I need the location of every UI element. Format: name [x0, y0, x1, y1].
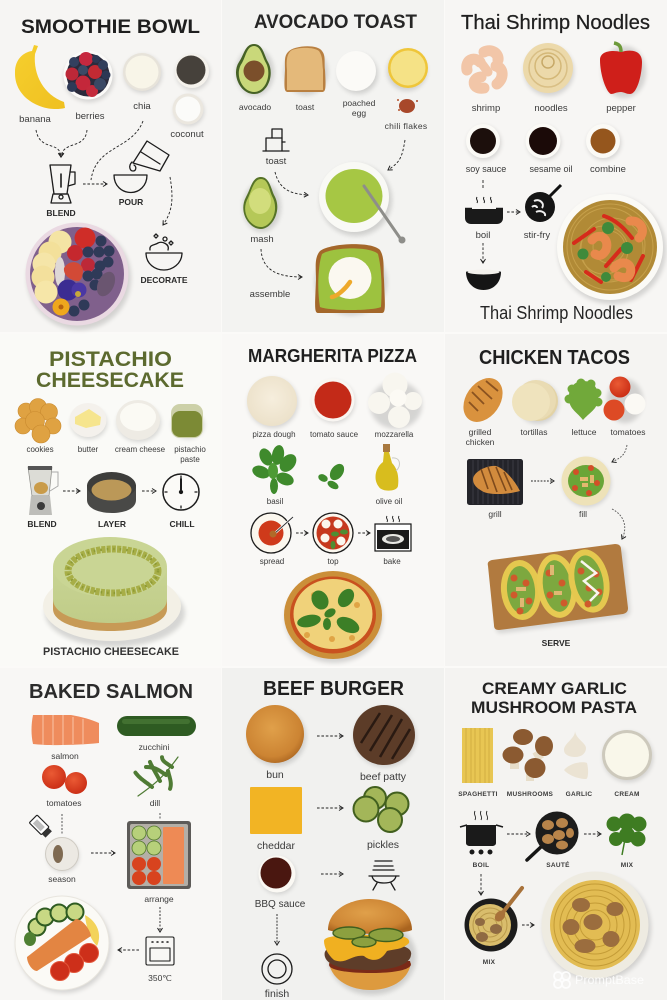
ingredient: pistachio paste: [171, 404, 204, 439]
arrow: spread to top: [296, 532, 308, 534]
arrow: boil to stir-fry: [507, 211, 520, 213]
label: mix step: MIX: [483, 959, 496, 966]
ingredient: beef patty: [353, 705, 416, 767]
ingredient: tomatoes and sour cream: [604, 376, 646, 423]
label: stir-fry: stir-fry: [524, 230, 550, 241]
ingredient: basil small: [317, 461, 347, 491]
title: creamy garlic mushroom pasta: MUSHROOM PASTA: [471, 699, 637, 717]
label: boil: BOIL: [473, 862, 489, 869]
finished thai noodles bowl: [557, 194, 666, 304]
labels: cheesecake ingredients: paste: [180, 455, 200, 464]
ingredient: tortillas: [512, 380, 559, 424]
icon: clock: [163, 474, 199, 510]
ingredient: poached egg: [336, 51, 378, 94]
arrow: pour to decorate: [163, 177, 172, 225]
ingredient: coconut: [172, 94, 204, 126]
ingredient: red pepper: [600, 43, 646, 98]
ingredient: dill: [135, 757, 178, 796]
finished creamy pasta bowl: [542, 872, 651, 981]
ingredient: grilled chicken: [455, 371, 511, 429]
labels: pizza steps: [260, 557, 401, 566]
icon: spread sauce: [251, 513, 293, 553]
labels: noodle ingredients: shrimp: [472, 103, 500, 114]
icon: saute pan: [527, 812, 578, 860]
label: oven temperature: 350℃: [148, 973, 172, 983]
seasoning bowl: [46, 838, 79, 872]
ingredient: mushrooms: [502, 729, 553, 781]
labels: pasta ingredients: SPAGHETTI: [458, 791, 498, 798]
labels: avocado toast ingredients: avocado: [239, 102, 271, 112]
caption: thai shrimp noodles: Thai Shrimp Noodles: [480, 303, 633, 323]
panel: baked salmon: [0, 668, 221, 1000]
arrow: toast to bowl: [275, 172, 308, 195]
labels: noodle ingredients: noodles: [534, 103, 568, 114]
icon: salt shaker: [29, 815, 53, 838]
pan with pasta and spoon: [464, 888, 522, 952]
labels: sauces: [466, 164, 626, 175]
sauce bowls: [466, 124, 621, 160]
labels: pizza steps: spread: [260, 557, 284, 566]
arrow: boil to pan: [480, 874, 482, 895]
labels: noodle ingredients: [472, 103, 636, 114]
labels: taco ingredients: tomatoes: [611, 427, 645, 437]
ingredient: mozzarella: [368, 372, 422, 429]
label: arrange: arrange: [144, 894, 174, 904]
arrow: tomatoes to fill: [612, 445, 627, 462]
labels: pasta ingredients: [458, 791, 640, 798]
labels: sauces: combine: [590, 164, 626, 175]
labels: cheesecake steps: [27, 519, 195, 529]
panel: creamy garlic mushroom pasta: [445, 668, 667, 1000]
ingredient: tomato sauce: [312, 378, 355, 423]
labels: sauces: sesame oil: [529, 164, 573, 174]
icon: boiling pot: [465, 197, 503, 224]
panel: pistachio cheesecake: [0, 334, 221, 666]
label: season: season: [48, 874, 76, 884]
label: pour: POUR: [119, 197, 143, 207]
arrow: chili to bowl: [388, 140, 405, 170]
labels: pasta ingredients: GARLIC: [566, 791, 592, 798]
ingredient: milk: [123, 53, 162, 93]
label: toast step: toast: [266, 156, 287, 167]
arrows: to blend: [36, 130, 87, 157]
ingredient: spaghetti: [462, 728, 493, 783]
title: avocado toast: AVOCADO TOAST: [254, 11, 417, 33]
labels: bun and patty: beef patty: [360, 771, 407, 783]
arrow: saute to mix: [584, 833, 601, 835]
arrow: blend to layer: [63, 490, 80, 492]
labels: pizza steps: top: [327, 557, 339, 566]
labels: pizza ingredients: pizza dough: [252, 430, 296, 439]
labels: avocado toast ingredients: toast: [296, 102, 315, 112]
icon: pouring pitcher and bowl: [114, 141, 169, 192]
ingredient: cream cheese: [116, 400, 161, 442]
labels: tomatoes and dill: dill: [150, 798, 160, 808]
arrow: boil to bowl: [482, 243, 484, 263]
labels: smoothie ingredients: coconut: [170, 129, 204, 140]
arrow: bbq to grill: [321, 873, 343, 875]
ingredient: pickles: [354, 787, 408, 832]
labels: cheesecake ingredients: [26, 445, 206, 464]
labels: tomatoes and dill: [47, 798, 160, 808]
dashes: sauces to boil: [482, 180, 484, 190]
arrow: top to bake: [358, 532, 370, 534]
arrow: arrange to oven: [159, 907, 161, 932]
labels: pizza extras: olive oil: [376, 497, 403, 506]
ingredient: avocado half: [236, 44, 274, 96]
arrow: bbq to finish: [276, 914, 278, 945]
labels: avocado toast ingredients: poached: [343, 98, 376, 108]
dotted guides: [62, 813, 160, 834]
icon: wok stir-fry: [525, 185, 561, 222]
icon: oven: [146, 937, 174, 965]
arrow: pan to bowl: [522, 924, 534, 926]
labels: cheddar and pickles: pickles: [367, 839, 399, 851]
labels: pizza ingredients: [252, 430, 414, 439]
arrow: boil to saute: [507, 833, 530, 835]
panel: margherita pizza: [222, 334, 444, 666]
ingredient: lettuce: [564, 378, 602, 420]
caption: pistachio cheesecake: PISTACHIO CHEESECAKE: [43, 646, 179, 658]
title: pistachio cheesecake: CHEESECAKE: [36, 369, 184, 392]
ingredient: parsley: [606, 814, 646, 855]
ingredient: olive oil: [376, 444, 399, 491]
panel: beef burger: [222, 668, 444, 1000]
labels: pizza ingredients: tomato sauce: [310, 430, 359, 439]
label: blend: BLEND: [46, 208, 76, 218]
title: beef burger: BEEF BURGER: [263, 678, 405, 700]
labels: cheddar and pickles: [257, 839, 399, 852]
labels: smoothie ingredients: banana: [19, 114, 52, 125]
labels: smoothie ingredients: [19, 101, 204, 140]
icon: grill: [369, 861, 399, 890]
labels: pizza extras: basil: [267, 497, 283, 506]
icon: blender: [50, 165, 75, 203]
title: pistachio cheesecake: PISTACHIO: [49, 348, 172, 371]
labels: taco ingredients: tortillas: [521, 427, 547, 437]
ingredient: bbq sauce: [258, 856, 296, 894]
ingredient: cream: [602, 730, 653, 782]
labels: pizza steps: bake: [383, 557, 401, 566]
guacamole bowl with fork: [319, 162, 406, 244]
ingredient: cookies: [15, 398, 61, 443]
arrow: mash to assemble: [261, 249, 302, 277]
labels: smoothie ingredients: chia: [133, 101, 151, 112]
title: smoothie bowl: SMOOTHIE BOWL: [21, 16, 200, 38]
labels: cheesecake ingredients: pistachio: [174, 445, 206, 454]
labels: cheesecake steps: CHILL: [169, 519, 195, 529]
labels: cheesecake ingredients: cookies: [26, 445, 54, 454]
filled tortilla: [562, 456, 611, 507]
label: assemble: assemble: [250, 289, 290, 300]
ingredient: bun: [246, 705, 306, 766]
labels: avocado toast ingredients: [239, 98, 427, 131]
ingredient: lemon: [387, 48, 428, 91]
title: creamy garlic mushroom pasta: [471, 680, 637, 717]
labels: pasta ingredients: MUSHROOMS: [507, 791, 554, 798]
baking tray: [127, 821, 191, 889]
ingredient: berries bowl: [64, 50, 114, 102]
icon: boiling pot: [460, 811, 503, 854]
ingredient: cheddar: [250, 787, 302, 834]
arrow: layer to chill: [142, 490, 156, 492]
ingredient: butter: [70, 403, 107, 439]
labels: salmon and zucchini: [51, 742, 169, 761]
icon: black bowl: [466, 270, 501, 290]
labels: pizza extras: [267, 497, 403, 506]
labels: taco ingredients: grilled: [469, 427, 492, 437]
blender: [28, 466, 58, 515]
labels: cheesecake steps: BLEND: [27, 519, 57, 529]
label: mix: MIX: [621, 862, 634, 869]
arrow: season to arrange: [91, 852, 115, 854]
labels: pasta ingredients: CREAM: [614, 791, 640, 798]
label: serve: SERVE: [542, 638, 571, 648]
finished smoothie bowl: [26, 222, 131, 330]
labels: pizza ingredients: mozzarella: [375, 430, 414, 439]
ingredient: tomatoes: [42, 765, 87, 794]
springform pan: [87, 472, 136, 513]
labels: bun and patty: bun: [266, 769, 284, 781]
assembled avocado toast: [315, 244, 387, 315]
ingredient: zucchini: [117, 716, 196, 736]
ingredient: chili flakes: [397, 99, 418, 113]
label: mash: mash: [250, 234, 274, 245]
ingredient: garlic: [564, 731, 588, 779]
labels: taco ingredients: chicken: [466, 437, 495, 447]
icon: top pizza: [313, 513, 353, 553]
labels: grill and fill: fill: [579, 509, 587, 519]
finished margherita pizza: [284, 571, 383, 663]
grill pan with chicken: [467, 459, 523, 505]
labels: cheesecake ingredients: butter: [78, 445, 99, 454]
arrow: oven to plate: [118, 949, 139, 951]
title: baked salmon: BAKED SALMON: [29, 681, 193, 703]
ingredient: toast slice: [284, 46, 328, 95]
finished burger: [324, 899, 416, 995]
labels: avocado toast ingredients: chili flakes: [385, 121, 427, 131]
labels: cheesecake steps: LAYER: [98, 519, 126, 529]
arrow: cheddar to pickles: [317, 807, 343, 809]
watermark: promptbase: [554, 972, 644, 988]
title: thai shrimp noodles: Thai Shrimp Noodles: [461, 12, 650, 34]
arrow: fill to serve: [612, 509, 625, 539]
label: boil: boil: [476, 230, 490, 241]
ingredient: banana: [15, 45, 65, 109]
labels: salmon and zucchini: zucchini: [139, 742, 169, 752]
icon: toaster: [263, 129, 289, 151]
icon: decorate bowl: [146, 234, 182, 270]
ingredient: noodles nest: [523, 43, 574, 96]
ingredient: shrimp: [467, 51, 502, 88]
ingredient: chia seeds: [175, 54, 210, 90]
label: finish: finish: [265, 988, 289, 1000]
finished pistachio cheesecake: [43, 537, 185, 647]
ingredient: salmon fillet: [32, 715, 99, 745]
labels: cheddar and pickles: cheddar: [257, 840, 295, 852]
labels: noodle ingredients: pepper: [606, 103, 636, 114]
label: saute: SAUTÉ: [546, 860, 570, 869]
arrow: grill to fill: [531, 480, 554, 482]
arrow: chia to pour: [91, 121, 143, 180]
icon: oven bake: [375, 516, 411, 551]
panel: smoothie bowl: [0, 0, 221, 332]
labels: bun and patty: [266, 769, 407, 783]
finished salmon plate: [15, 896, 111, 993]
labels: smoothie ingredients: berries: [75, 111, 105, 122]
labels: avocado toast ingredients: egg: [352, 108, 366, 118]
arrow: blend to pour: [83, 183, 107, 185]
title: chicken tacos: CHICKEN TACOS: [479, 347, 630, 369]
finished tacos on board: [488, 544, 630, 633]
watermark: promptbase: PromptBase: [575, 973, 644, 987]
title: creamy garlic mushroom pasta: CREAMY GARLIC: [482, 680, 627, 698]
label: decorate: DECORATE: [140, 275, 188, 285]
ingredient: basil large: [250, 444, 300, 494]
label: bbq sauce: BBQ sauce: [255, 899, 306, 910]
panel: avocado toast: [222, 0, 444, 332]
title: pistachio cheesecake: [36, 348, 184, 392]
labels: taco ingredients: lettuce: [571, 427, 597, 437]
labels: taco ingredients: [466, 427, 645, 447]
panel: thai shrimp noodles: [445, 0, 667, 332]
labels: grill and fill: grill: [488, 509, 502, 519]
panel: chicken tacos: [445, 334, 667, 666]
ingredient: pizza dough: [247, 376, 298, 428]
labels: tomatoes and dill: tomatoes: [47, 798, 81, 808]
labels: salmon and zucchini: salmon: [51, 751, 79, 761]
title: margherita pizza: MARGHERITA PIZZA: [248, 346, 417, 366]
icon: finish plate: [262, 954, 292, 984]
arrow: bun to patty: [317, 735, 343, 737]
labels: sauces: soy sauce: [466, 164, 506, 174]
avocado half: mash: [243, 177, 281, 232]
labels: cheesecake ingredients: cream cheese: [115, 445, 166, 454]
labels: grill and fill: [488, 509, 587, 519]
